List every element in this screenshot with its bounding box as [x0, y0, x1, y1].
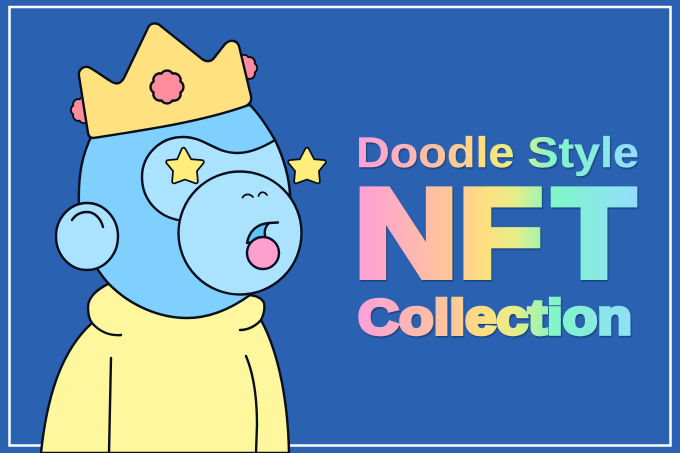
- flower: crown centre: [151, 71, 183, 103]
- heading: Doodle Style NFT Collection: [354, 129, 639, 345]
- heading letter: T: T: [553, 162, 635, 304]
- ear: [56, 203, 118, 270]
- flower: right, behind crown: [231, 55, 257, 81]
- heading letter: F: F: [458, 162, 543, 304]
- nostrils: [242, 192, 267, 198]
- star: right: [290, 150, 324, 182]
- character: doodle ape: [41, 23, 324, 453]
- muzzle: [178, 172, 302, 294]
- heading line: Doodle Style: Doodle Style: [356, 129, 639, 177]
- heading letter: N: N: [354, 162, 458, 304]
- face patch: [142, 137, 290, 240]
- flower: left, behind crown: [71, 97, 97, 123]
- heading line: Collection: Collection: [358, 291, 632, 345]
- head: [79, 105, 295, 318]
- head right edge: [275, 140, 290, 195]
- star: left eye: [168, 150, 202, 182]
- face patch outline: [142, 137, 275, 220]
- crown: [79, 23, 251, 138]
- mouth: [247, 222, 279, 269]
- sweater: [41, 284, 289, 453]
